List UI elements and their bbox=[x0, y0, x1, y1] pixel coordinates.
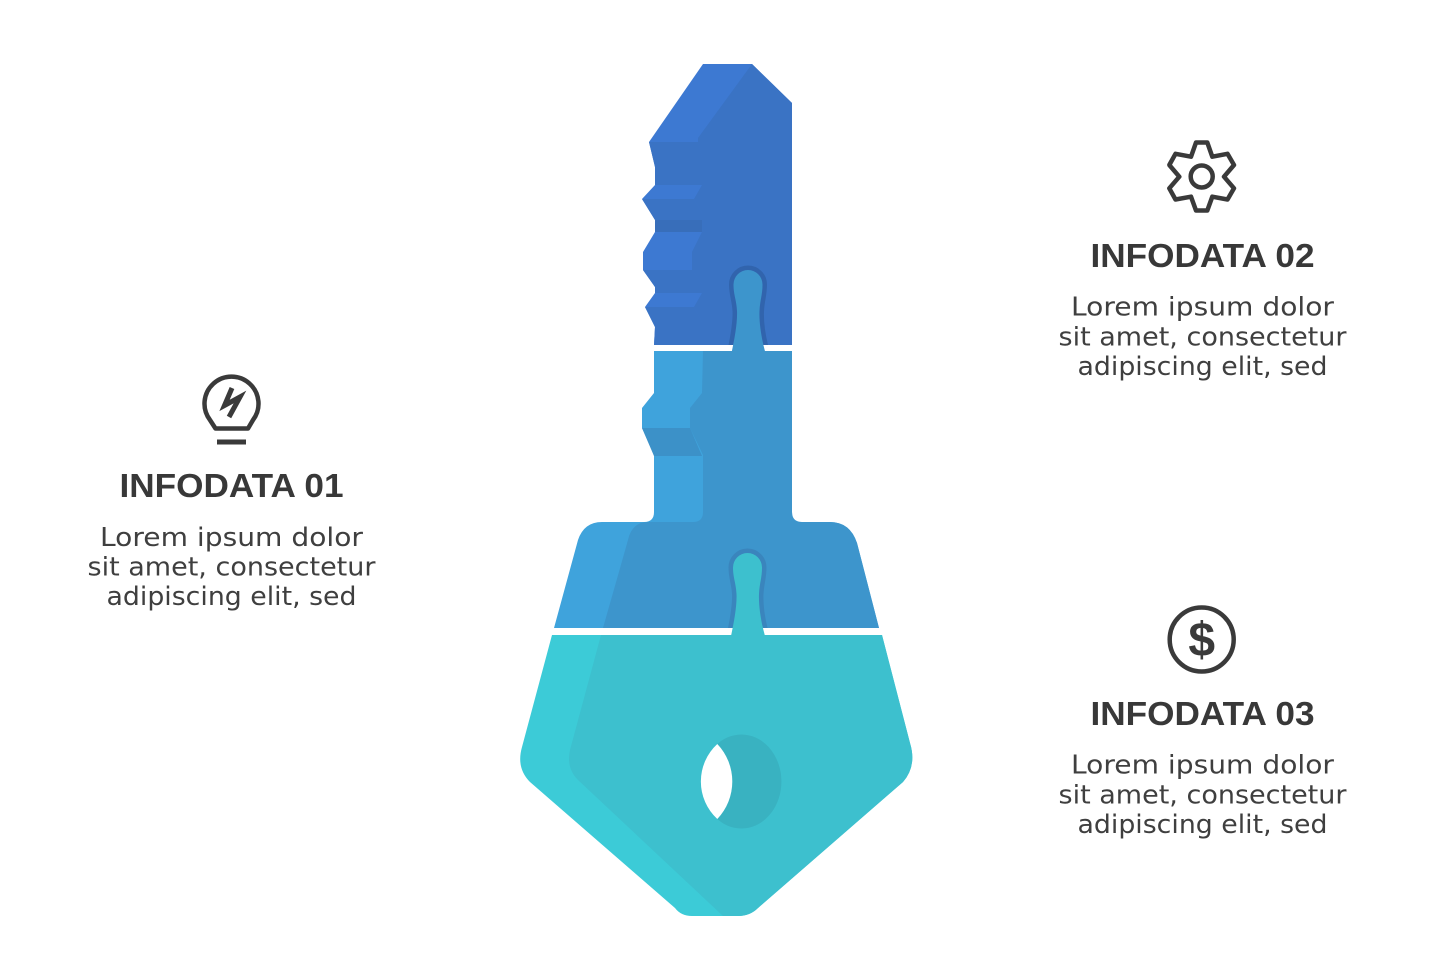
key graphic bbox=[520, 64, 912, 916]
block: infodata 02 bbox=[1058, 142, 1347, 382]
connector tab into segment 1 bbox=[732, 270, 766, 353]
text block 01 bbox=[88, 523, 376, 612]
heading 01: INFODATA 01 bbox=[120, 468, 344, 505]
text block 01: Lorem ipsum dolor bbox=[100, 523, 364, 553]
connector tab into segment 2 bbox=[731, 553, 765, 636]
text block 01: adipiscing elit, sed bbox=[106, 582, 356, 612]
icon: dollar coin bbox=[1170, 608, 1234, 672]
text block 03 bbox=[1058, 750, 1347, 840]
keyhole notch outline, segment 2 bbox=[731, 553, 765, 636]
keyhole notch outline, segment 1 bbox=[732, 270, 766, 353]
block: infodata 01 bbox=[88, 377, 376, 612]
block: infodata 03 bbox=[1058, 608, 1347, 840]
heading 02: INFODATA 02 bbox=[1090, 238, 1314, 275]
key segment 3: teal head bbox=[520, 553, 912, 916]
icon: light bulb bbox=[204, 377, 258, 442]
heading 03: INFODATA 03 bbox=[1090, 696, 1314, 733]
keyhole opening bbox=[701, 744, 732, 819]
text block 02: adipiscing elit, sed bbox=[1078, 352, 1328, 382]
text block 02: sit amet, consectetur bbox=[1058, 322, 1347, 352]
text block 02: Lorem ipsum dolor bbox=[1071, 292, 1335, 322]
icon: dollar coin: $ bbox=[1188, 614, 1215, 667]
text block 03: Lorem ipsum dolor bbox=[1071, 750, 1335, 780]
text block 02 bbox=[1058, 292, 1347, 382]
icon: gear bbox=[1169, 142, 1234, 210]
text block 03: adipiscing elit, sed bbox=[1078, 810, 1328, 840]
text block 03: sit amet, consectetur bbox=[1058, 780, 1347, 810]
text block 01: sit amet, consectetur bbox=[88, 552, 376, 582]
keyhole shadow bbox=[717, 734, 781, 829]
key segment 1: blue bit bbox=[642, 64, 792, 353]
key segment 2: mid blue shank bbox=[554, 270, 879, 636]
